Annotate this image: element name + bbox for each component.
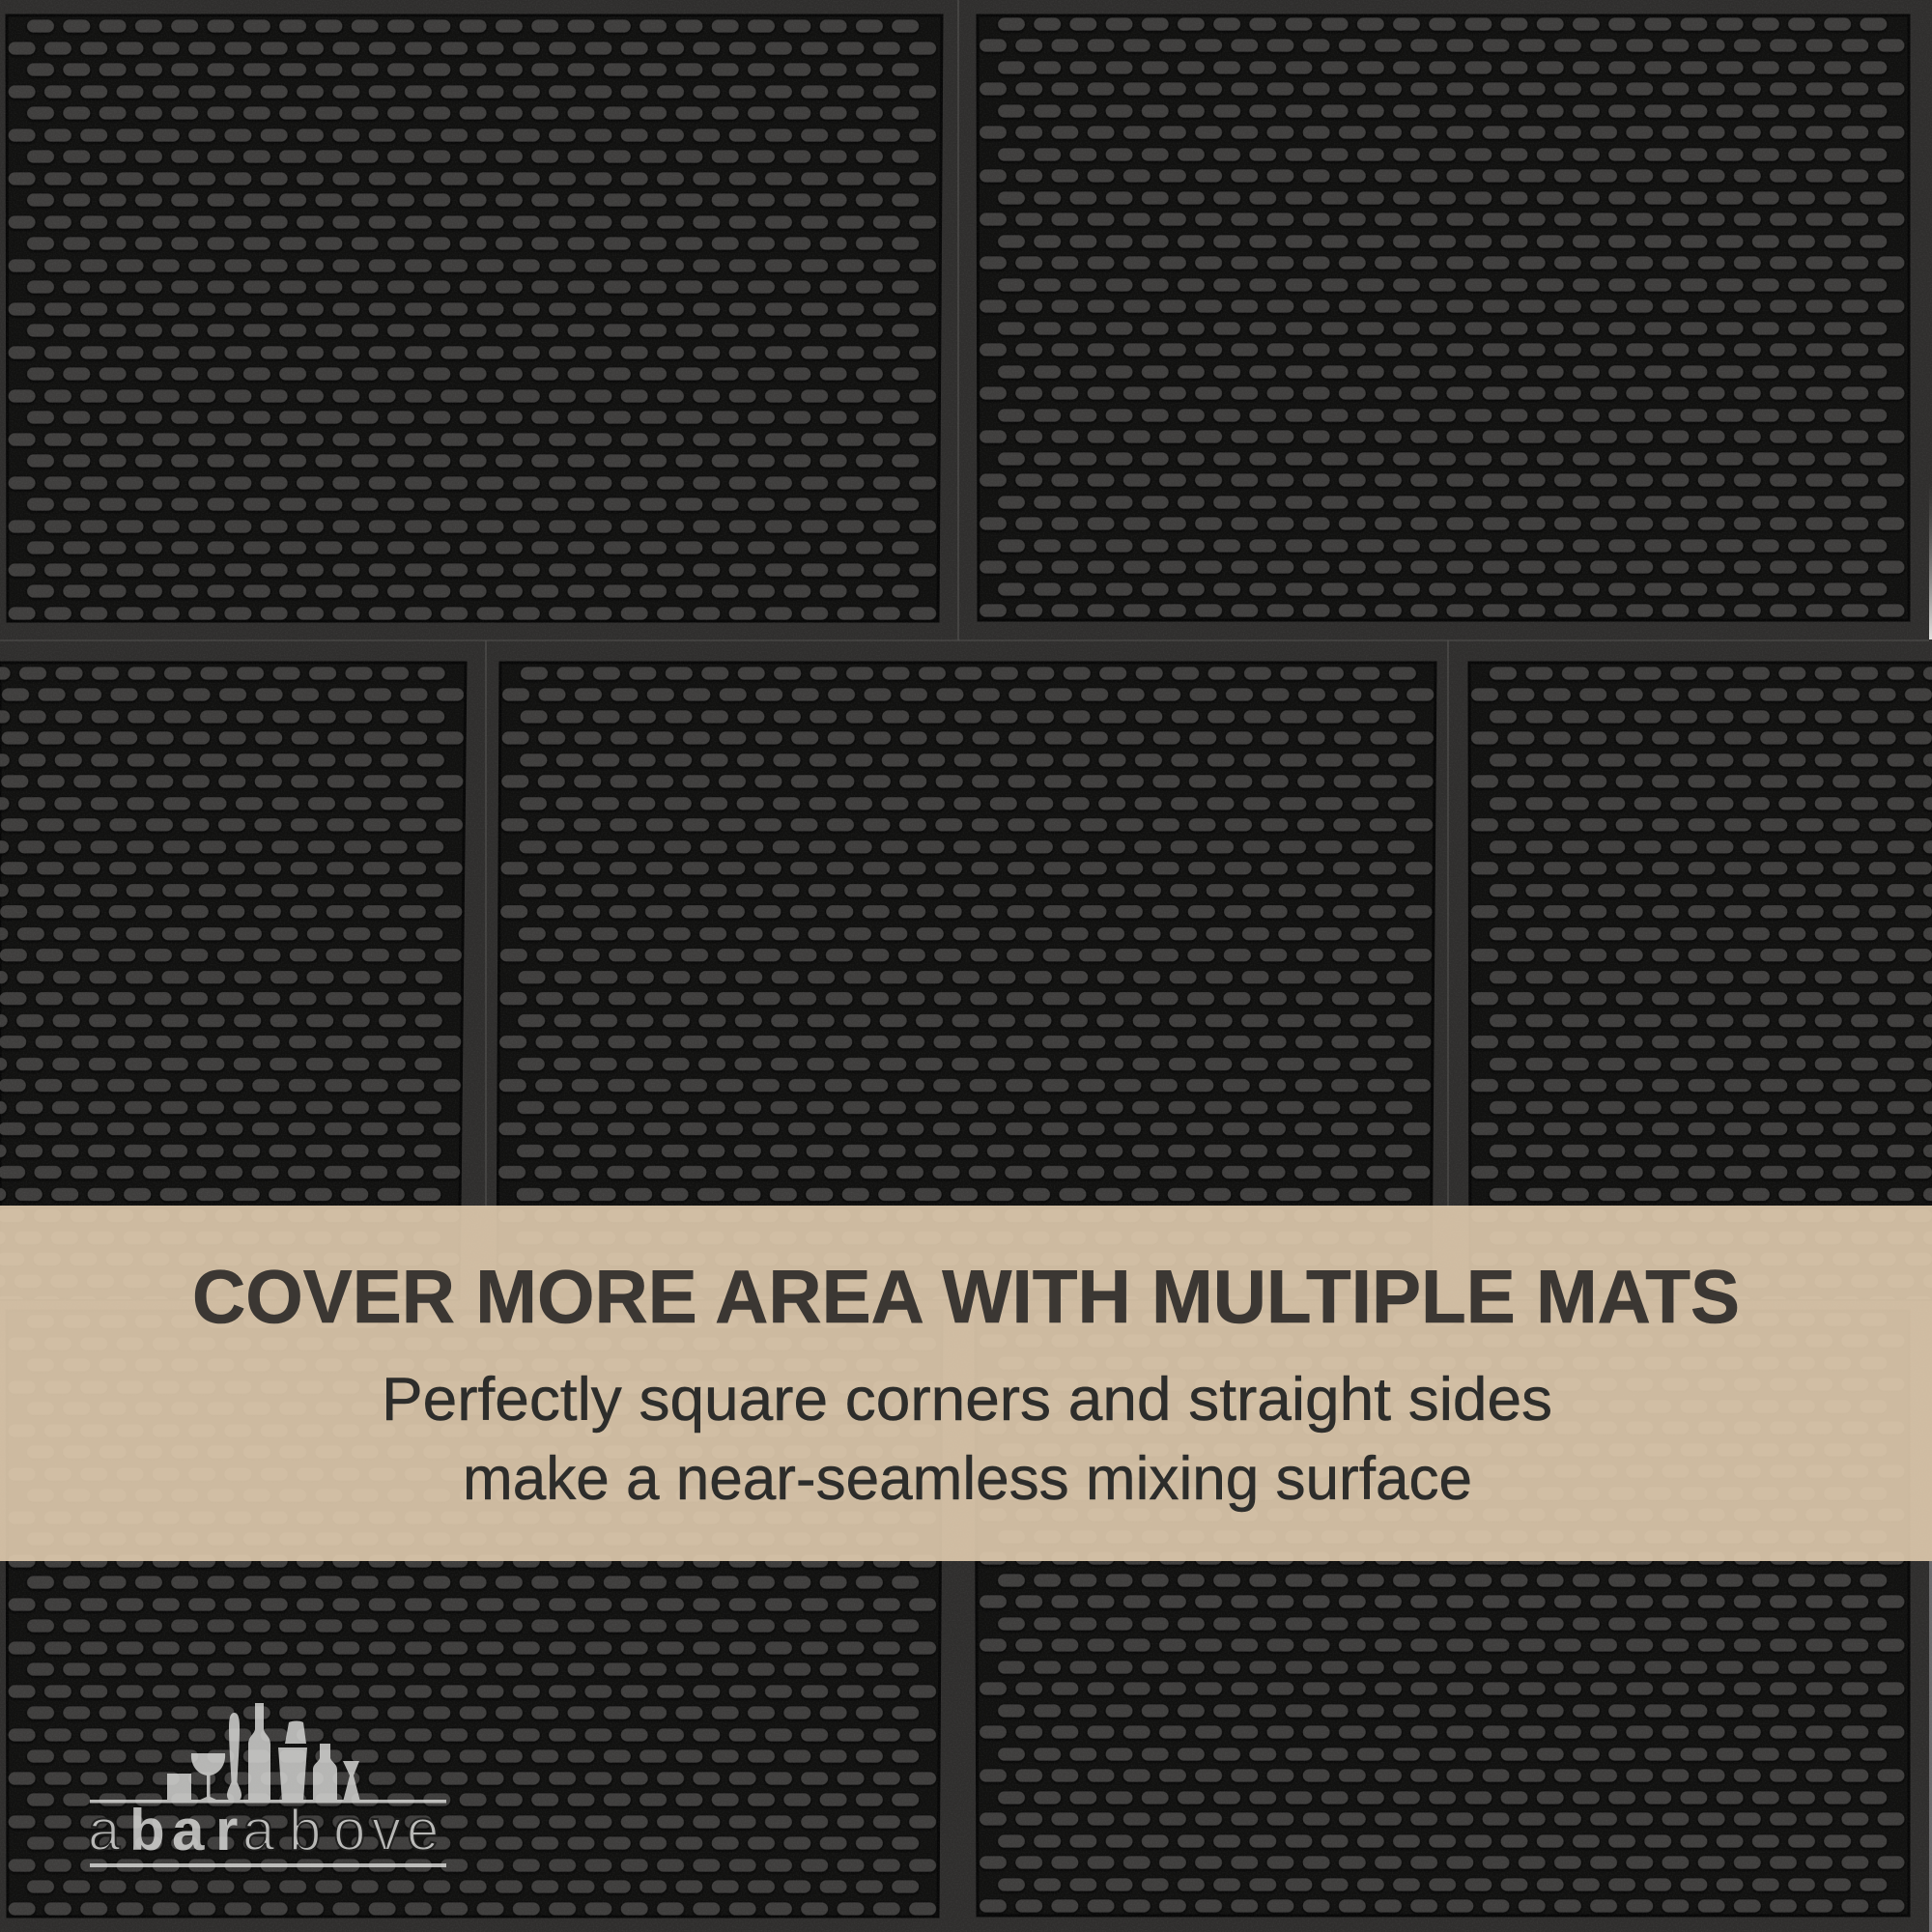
mat: top left xyxy=(7,15,942,621)
logo wordmark: o xyxy=(333,1798,365,1862)
logo wordmark: b xyxy=(289,1798,321,1862)
logo wordmark: e xyxy=(407,1798,439,1862)
logo wordmark: b xyxy=(129,1798,165,1862)
logo wordmark: r xyxy=(215,1798,238,1862)
mat: middle right xyxy=(1469,663,1932,1299)
logo wordmark: a xyxy=(242,1798,275,1862)
icon: muddler xyxy=(227,1713,242,1802)
icon: coupe glass xyxy=(191,1753,225,1801)
logo wordmark: v xyxy=(372,1798,401,1862)
mat: top right xyxy=(978,15,1909,620)
logo: a bar above xyxy=(88,1703,446,1867)
icon: small bottle xyxy=(313,1744,337,1802)
banner xyxy=(0,1206,1932,1561)
mat: bottom right xyxy=(976,1311,1909,1916)
logo wordmark: a xyxy=(172,1798,205,1862)
mat: middle centre xyxy=(497,663,1435,1299)
subheading line 1: Perfectly square corners and straight sides xyxy=(382,1366,1552,1434)
logo upper rule xyxy=(90,1800,446,1803)
logo wordmark: a xyxy=(88,1798,121,1862)
icon: jigger xyxy=(343,1761,360,1802)
icon: tall bottle xyxy=(248,1703,270,1802)
mat: bottom left xyxy=(7,1311,942,1917)
icon: cocktail shaker xyxy=(278,1721,307,1802)
subheading line 2: make a near-seamless mixing surface xyxy=(463,1445,1472,1513)
heading: COVER MORE AREA WITH MULTIPLE MATS xyxy=(192,1254,1740,1339)
icon: tumbler glass xyxy=(167,1774,191,1802)
logo lower rule xyxy=(90,1863,446,1867)
mat: middle left xyxy=(0,663,466,1299)
